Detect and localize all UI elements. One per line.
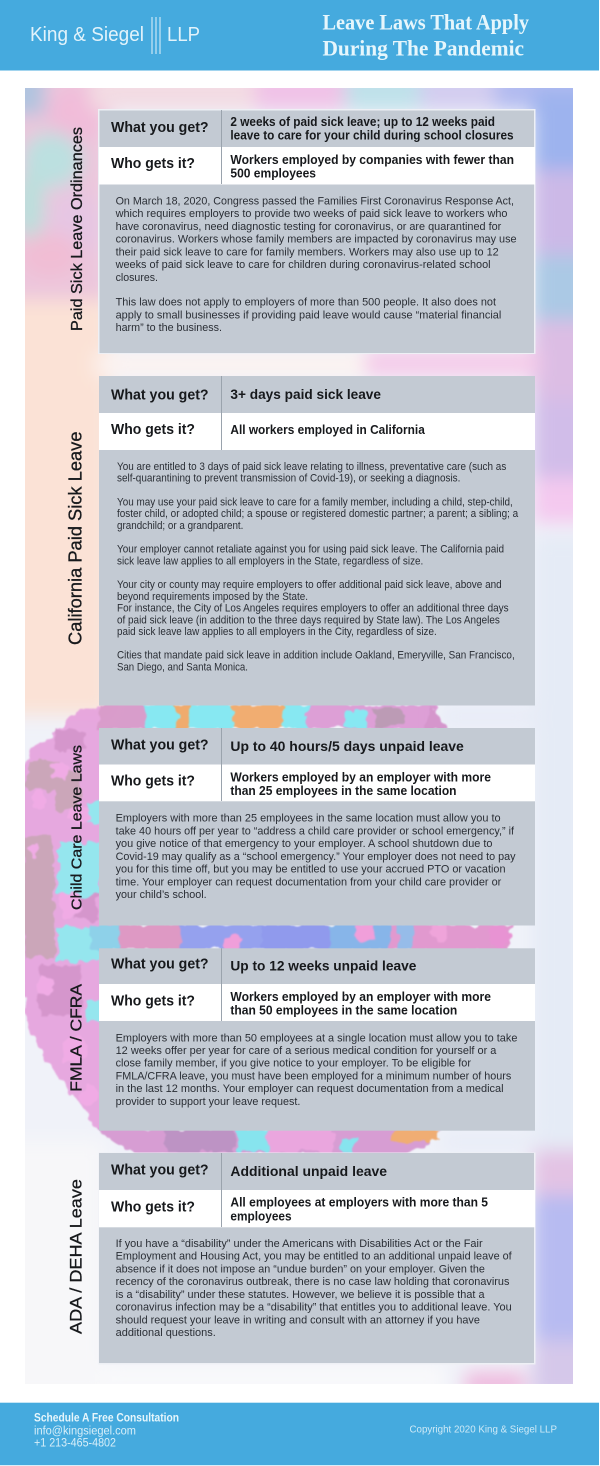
title: Leave Laws That Apply (322, 10, 529, 34)
body text: absence if it does not impose an “undue burden” on your employer. Given the (116, 1263, 485, 1275)
body text: You may use your paid sick leave to care for a family member, including a child, step-child, (117, 496, 513, 508)
strip above ADA card (98, 1128, 441, 1152)
body text: You are entitled to 3 days of paid sick leave relating to illness, preventative care (such as (117, 461, 507, 473)
body text: coronavirus. Workers whose family members are impacted by coronavirus may use (116, 234, 517, 246)
body text: in the last 12 months. Your employer can request documentation from a medical (116, 1083, 504, 1095)
section: FMLA / CFRA (68, 948, 535, 1131)
footer band (0, 1403, 599, 1465)
card: Who gets it? (111, 993, 195, 1009)
body text: beyond requirements imposed by the State. (117, 591, 308, 603)
contact details (34, 1413, 179, 1450)
title: During The Pandemic (322, 36, 524, 60)
body text: Cities that mandate paid sick leave in addition include Oakland, Emeryville, San Francisco, (117, 650, 515, 662)
copyright: Copyright 2020 King & Siegel LLP (410, 1424, 557, 1436)
card: All employees at employers with more than 5 (230, 1196, 488, 1210)
body text: additional questions. (116, 1327, 216, 1339)
body text (117, 461, 519, 673)
card: All workers employed in California (230, 423, 426, 437)
card: than 50 employees in the same location (230, 1004, 457, 1018)
body text: FMLA/CFRA leave, you must have been employed for a minimum number of hours (116, 1070, 512, 1082)
card: Workers employed by an employer with more (230, 990, 491, 1004)
card: than 25 employees in the same location (230, 784, 456, 798)
body text: self-quarantining to prevent transmission of Covid-19), or seeking a diagnosis. (117, 473, 460, 485)
body text: Your city or county may require employers to offer additional paid sick leave, above and (117, 579, 502, 591)
body text (116, 813, 516, 901)
section: Paid Sick Leave Ordinances (69, 109, 536, 354)
body text: you for this time off, but you may be entitled to use your accrued PTO or vacation (116, 864, 505, 876)
body text: This law does not apply to employers of more than 500 people. It also does not (116, 297, 497, 309)
body text: foster child, or adopted child; a spouse or registered domestic partner; a parent; a sibling; a (117, 508, 519, 520)
card (99, 376, 535, 706)
body text: coronavirus infection may be a “disability” that entitles you to additional leave. You (116, 1302, 512, 1314)
side heading: California Paid Sick Leave (66, 432, 86, 645)
card: Who gets it? (111, 774, 195, 790)
side heading: FMLA / CFRA (68, 984, 86, 1092)
body text: San Diego, and Santa Monica. (117, 661, 248, 673)
body text: close family member, if you give notice to your employer. To be eligible for (116, 1058, 471, 1070)
body text: Employers with more than 25 employees in the same location must allow you to (116, 813, 501, 825)
body text: closures. (116, 272, 158, 284)
body text: For instance, the City of Los Angeles requires employers to offer an additional three days (117, 603, 509, 615)
body text: weeks of paid sick leave to care for children during coronavirus-related school (115, 259, 491, 271)
card: What you get? (111, 1163, 209, 1179)
header band (0, 0, 599, 70)
body text: sick leave law applies to all employers in the State, regardless of size. (117, 555, 423, 567)
section: Child Care Leave Laws (68, 728, 535, 926)
body text: 12 weeks offer per year for care of a serious medical condition for yourself or a (116, 1045, 497, 1057)
body text: of paid sick leave (in addition to the three days required by State law). The Los Angeles (117, 614, 500, 626)
body text: grandchild; or a grandparent. (117, 520, 243, 532)
strip above child care card (99, 704, 146, 730)
body text: their paid sick leave to care for family members. Workers may also use up to 12 (116, 246, 499, 258)
section: ADA / DEHA Leave (66, 1152, 536, 1364)
card: Up to 12 weeks unpaid leave (230, 957, 417, 973)
body text (116, 1032, 517, 1108)
body text: recency of the coronavirus outbreak, there is no case law holding that coronavirus (116, 1276, 510, 1288)
contact details: Schedule A Free Consultation (34, 1413, 179, 1425)
card: Who gets it? (111, 1199, 195, 1215)
body text: you give notice of that emergency to your employer. A school shutdown due to (116, 838, 492, 850)
body text: is a “disability” under these statutes. However, we believe it is possible that a (116, 1289, 485, 1301)
body text (115, 195, 517, 334)
strip above FMLA card (90, 924, 122, 950)
card: What you get? (111, 957, 209, 973)
card: 500 employees (230, 167, 316, 181)
body text: Your employer cannot retaliate against you for using paid sick leave. The California paid (117, 544, 504, 556)
card (99, 948, 535, 1131)
card: What you get? (111, 120, 209, 136)
card: 3+ days paid sick leave (230, 386, 381, 402)
logo: King & Siegel LLP (30, 17, 200, 54)
card (98, 1152, 536, 1364)
body text: which requires employers to provide two weeks of paid sick leave to workers who (115, 208, 507, 220)
body text: have coronavirus, need diagnostic testing for coronavirus, or are quarantined for (116, 221, 502, 233)
body text: Employment and Housing Act, you may be entitled to an additional unpaid leave of (116, 1251, 513, 1263)
contact details: info@kingsiegel.com (34, 1425, 136, 1437)
side heading: ADA / DEHA Leave (66, 1179, 86, 1334)
body text (116, 1238, 513, 1339)
body text: time. Your employer can request documentation from your child care provider or (116, 876, 502, 888)
body text: Employers with more than 50 employees at a single location must allow you to take (116, 1032, 517, 1044)
body text: paid sick leave law applies to all employers in the City, regardless of size. (117, 626, 437, 638)
card: Workers employed by an employer with more (230, 770, 491, 784)
card: 2 weeks of paid sick leave; up to 12 weeks paid (230, 115, 495, 129)
body text: Covid-19 may qualify as a “school emergency.” Your employer does not need to pay (116, 851, 516, 863)
card: Workers employed by companies with fewer than (230, 153, 514, 167)
contact details: +1 213-465-4802 (34, 1438, 116, 1450)
side heading: Paid Sick Leave Ordinances (69, 127, 86, 331)
body text: provider to support your leave request. (116, 1096, 300, 1108)
logo: King & Siegel LLP: King & Siegel (30, 24, 144, 46)
card: Additional unpaid leave (230, 1163, 387, 1179)
title (322, 10, 529, 60)
card (99, 728, 535, 926)
card (98, 109, 536, 354)
body text: take 40 hours off per year to “address a child care provider or school emergency,” if (116, 825, 515, 837)
card: Up to 40 hours/5 days unpaid leave (230, 738, 464, 754)
body text: harm” to the business. (116, 322, 222, 334)
body text: If you have a “disability” under the Americans with Disabilities Act or the Fair (116, 1238, 483, 1250)
card: employees (230, 1209, 292, 1223)
logo: King & Siegel LLP: LLP (167, 24, 200, 46)
body text: should request your leave in writing and consult with an attorney if you have (116, 1314, 480, 1326)
body text: apply to small businesses if providing paid leave would cause “material financial (116, 310, 501, 322)
virus illustration (18, 704, 511, 1156)
section: California Paid Sick Leave (66, 376, 535, 706)
body text: your child’s school. (116, 889, 207, 901)
body text: On March 18, 2020, Congress passed the Families First Coronavirus Response Act, (116, 195, 514, 207)
card: Who gets it? (111, 156, 195, 172)
side heading: Child Care Leave Laws (68, 745, 86, 910)
card: leave to care for your child during school closures (230, 129, 514, 143)
card: What you get? (111, 737, 209, 753)
card: Who gets it? (111, 422, 195, 438)
card: What you get? (111, 387, 209, 403)
